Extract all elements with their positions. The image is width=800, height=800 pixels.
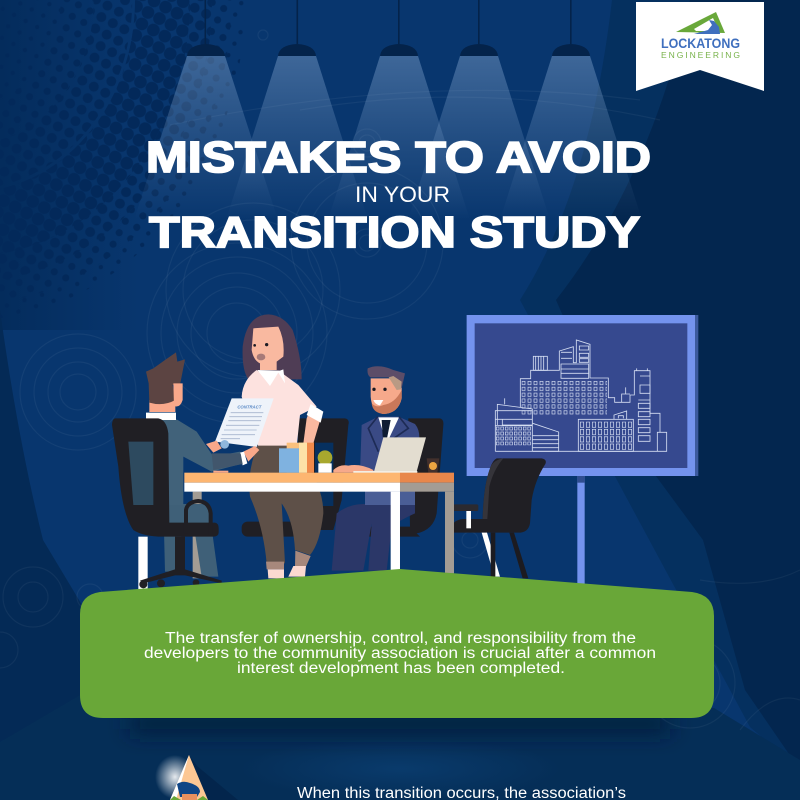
left man chair: [112, 418, 222, 588]
woman arm: [303, 405, 323, 443]
chair back and seat: [112, 418, 219, 537]
left man trousers: [163, 504, 218, 577]
contract document: CONTRACT: [237, 404, 262, 409]
logo tagline: ENGINEERING: [661, 50, 740, 60]
lamp 5: [500, 0, 642, 220]
title: IN YOUR: [355, 182, 450, 207]
man on right: [332, 366, 426, 571]
logo banner: [636, 2, 764, 91]
city blueprint: [495, 340, 667, 451]
chair behind woman: [242, 418, 349, 537]
contract document: [215, 398, 274, 449]
laptop: [374, 437, 426, 472]
intro text: interest development has been completed.: [237, 660, 565, 677]
potted plant: [318, 450, 332, 473]
chair base: [140, 537, 222, 583]
woman hair: [243, 314, 302, 379]
left man hands: [206, 441, 259, 473]
board frame: [467, 315, 698, 476]
right man legs: [332, 492, 415, 571]
table: [184, 473, 454, 572]
meeting scene: [112, 314, 454, 590]
right man hands: [333, 465, 373, 473]
empty chair: [450, 458, 546, 578]
far table leg: [193, 492, 202, 578]
intro text: [144, 630, 656, 677]
title: TRANSITION STUDY: [149, 208, 640, 257]
left man head: [149, 400, 175, 412]
intro text: The transfer of ownership, control, and responsibility from the: [165, 630, 636, 647]
title: MISTAKES TO AVOID: [146, 133, 651, 182]
logo name: LOCKATONG: [661, 36, 740, 51]
halftone dots: [42, 0, 244, 302]
boxes on table: [279, 443, 314, 473]
board pole: [577, 476, 585, 584]
intro text: developers to the community association is crucial after a common: [144, 645, 656, 662]
woman face: [252, 327, 284, 370]
woman blouse: [242, 370, 317, 447]
title: [146, 133, 651, 257]
logo mark: [676, 12, 725, 34]
woman shoes: [268, 566, 306, 578]
woman: [242, 314, 323, 578]
man on left: [112, 352, 243, 588]
chair armrest: [186, 501, 211, 535]
right man jacket: [360, 417, 419, 473]
woman trousers: [249, 446, 323, 563]
presentation board: [467, 315, 698, 584]
right man head: [371, 378, 402, 414]
chair behind right man: [352, 418, 443, 537]
coffee cup: [427, 458, 439, 473]
ceiling lamps: [134, 0, 642, 220]
near table leg: [138, 537, 148, 590]
lamp 2: [226, 0, 368, 220]
lamp 4: [408, 0, 550, 220]
left man jacket: [160, 419, 243, 505]
lamp 1: [134, 0, 278, 220]
icon: person under spotlight: [155, 755, 238, 800]
lamp 3: [328, 0, 470, 220]
green intro panel: [80, 569, 714, 718]
